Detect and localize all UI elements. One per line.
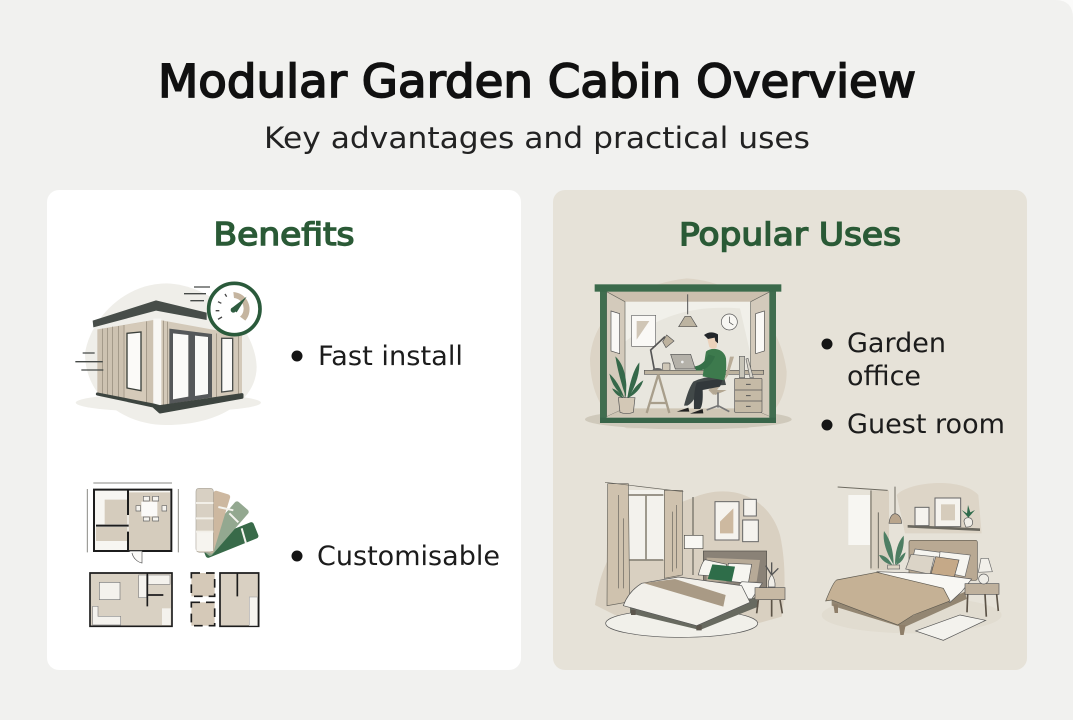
illustration: guest bedroom with window: [595, 482, 785, 637]
icon: cabin with speed gauge: [75, 283, 261, 425]
illustration: garden office: [585, 278, 792, 429]
bullet: customisable: Customisable: [317, 541, 500, 572]
panel: popular uses: [553, 190, 1027, 670]
heading: benefits: Benefits: [214, 217, 354, 253]
illustration: guest bedroom with shelf: [822, 483, 1002, 640]
heading: popular uses: Popular Uses: [679, 217, 901, 253]
title: Modular Garden Cabin Overview: [158, 55, 916, 108]
bullets: garden office and guest room: Garden: [847, 328, 946, 359]
subtitle: Key advantages and practical uses: [264, 121, 810, 155]
bullets: garden office and guest room: [822, 328, 1005, 440]
panel: benefits: [47, 190, 521, 670]
bullets: garden office and guest room: Guest room: [847, 409, 1005, 440]
bullets: garden office and guest room: office: [847, 361, 921, 392]
icon: floor plans and colour swatches: [87, 483, 259, 626]
bullet: fast install: Fast install: [318, 341, 463, 372]
